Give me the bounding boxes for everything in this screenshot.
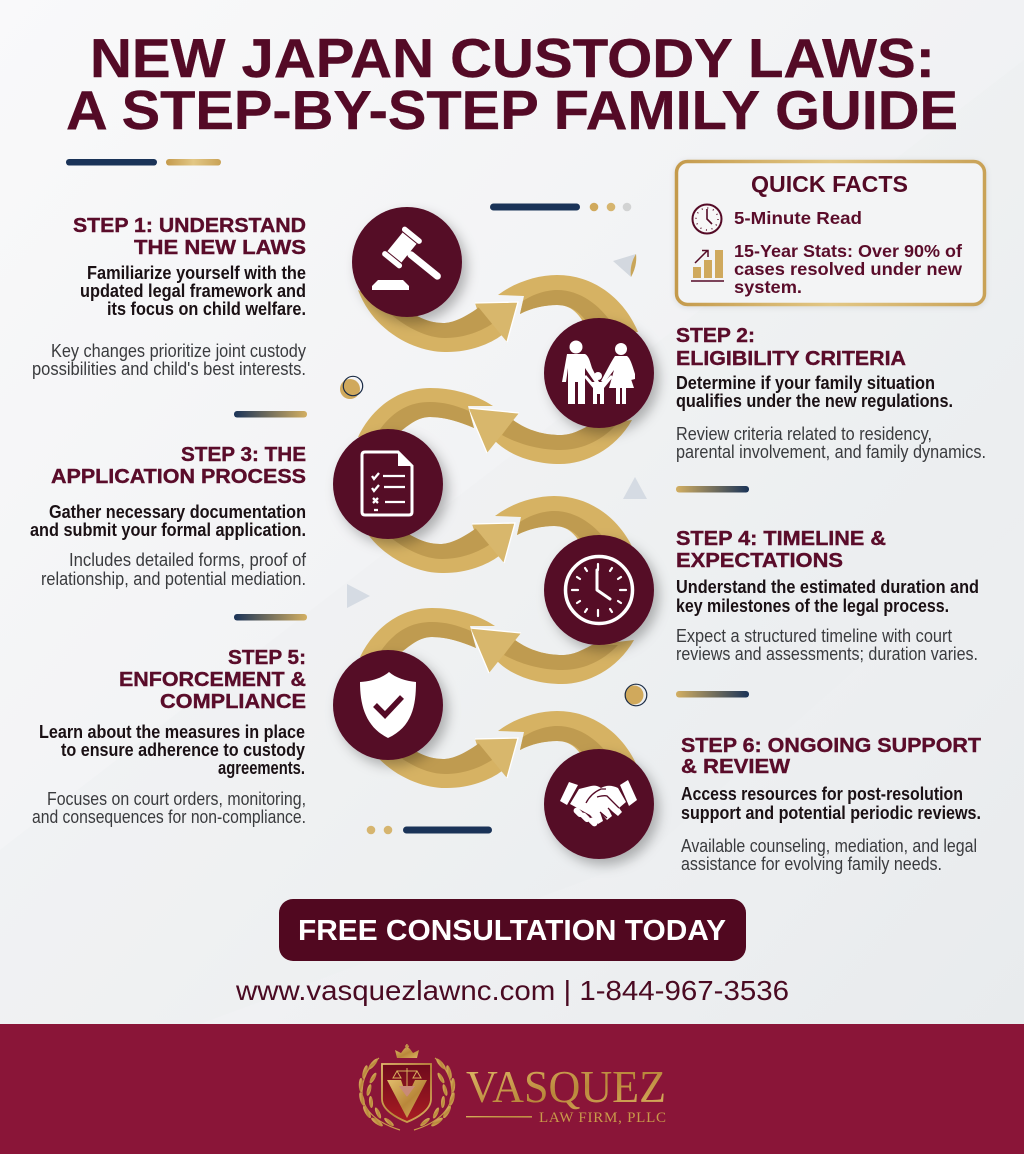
step 4 text block: reviews and assessments; duration varies. — [676, 644, 978, 664]
step 1 text block — [32, 214, 306, 379]
logo: laurel left — [358, 1057, 400, 1130]
step 6 text block — [681, 734, 981, 874]
step 1 text block: Familiarize yourself with the — [87, 263, 306, 283]
step 1 text block: STEP 1: UNDERSTAND — [73, 214, 306, 237]
step 6 text block: STEP 6: ONGOING SUPPORT — [681, 734, 981, 757]
decorative bar and dots: bottom — [367, 826, 492, 834]
15-year stats text: cases resolved under new — [734, 259, 962, 279]
step 1 circle: gavel icon — [352, 207, 462, 317]
step 4 text block: Understand the estimated duration and — [676, 577, 979, 597]
step 3 circle: checklist document icon — [333, 429, 443, 539]
decorative ring: left — [340, 376, 363, 399]
logo: rule — [466, 1116, 532, 1118]
logo: shield — [382, 1064, 431, 1122]
step 6 text block: assistance for evolving family needs. — [681, 854, 942, 874]
step 5 text block — [32, 646, 306, 827]
footer band — [0, 1024, 1024, 1154]
step 2 text block: ELIGIBILITY CRITERIA — [676, 347, 906, 370]
decorative bar and dots: top — [490, 203, 631, 211]
logo: laurel right — [414, 1057, 456, 1130]
step 5 text block: ENFORCEMENT & — [119, 668, 306, 691]
step 5 text block: and consequences for non-compliance. — [32, 807, 306, 827]
step 6 text block: support and potential periodic reviews. — [681, 803, 981, 823]
15-year stats text: 15-Year Stats: Over 90% of — [734, 241, 962, 261]
step 4 text block: key milestones of the legal process. — [676, 596, 949, 616]
title: NEW JAPAN CUSTODY LAWS: — [90, 27, 935, 89]
divider: right 2 — [676, 691, 749, 698]
step 4 text block — [676, 527, 979, 664]
decorative triangle: top right — [613, 254, 636, 277]
title accent bars — [66, 159, 221, 166]
quick facts panel — [676, 162, 984, 304]
step 5 text block: STEP 5: — [228, 646, 306, 669]
step 3 text block: Includes detailed forms, proof of — [69, 550, 307, 570]
step 1 text block: updated legal framework and — [80, 281, 306, 301]
step 5 text block: Learn about the measures in place — [39, 722, 305, 742]
arrow: step 2 to step 3 — [358, 388, 632, 464]
step 2 text block: STEP 2: — [676, 324, 755, 347]
step 3 text block — [30, 443, 307, 589]
step 5 text block: agreements. — [218, 758, 305, 778]
contact line: www.vasquezlawnc.com | 1-844-967-3536 — [235, 975, 789, 1006]
arrow: step 1 to step 2 — [358, 275, 638, 352]
divider: left 1 — [234, 411, 307, 418]
step 4 circle: clock icon — [544, 535, 654, 645]
step 3 text block: STEP 3: THE — [181, 443, 306, 466]
step 2 text block: parental involvement, and family dynamics. — [676, 442, 986, 462]
decorative triangle: centre right — [623, 477, 647, 499]
divider: right 1 — [676, 486, 749, 492]
logo: crown — [395, 1044, 419, 1058]
step 3 text block: and submit your formal application. — [30, 520, 306, 540]
title — [66, 27, 958, 141]
step 3 text block: relationship, and potential mediation. — [41, 569, 306, 589]
step 6 text block: Access resources for post-resolution — [681, 784, 963, 804]
arrow: step 3 to step 4 — [355, 496, 635, 573]
step 2 circle: family icon — [544, 318, 654, 428]
step 1 text block: possibilities and child's best interests. — [32, 359, 306, 379]
logo: wordmark: VASQUEZ — [466, 1061, 666, 1112]
step 1 text block: THE NEW LAWS — [134, 236, 306, 259]
step 6 text block: Available counseling, mediation, and legal — [681, 836, 977, 856]
step 6 circle: handshake icon — [544, 749, 654, 859]
5-minute read text: 5-Minute Read — [734, 208, 862, 228]
15-year stats text: system. — [734, 277, 802, 297]
step 5 text block: Focuses on court orders, monitoring, — [47, 789, 306, 809]
step 1 text block: Key changes prioritize joint custody — [51, 341, 306, 361]
step 1 text block: its focus on child welfare. — [107, 299, 306, 319]
step 4 text block: Expect a structured timeline with court — [676, 626, 952, 646]
divider: left 2 — [234, 614, 307, 620]
step 4 text block: EXPECTATIONS — [676, 549, 843, 572]
icon: rising bar chart — [691, 250, 724, 281]
call to action button: FREE CONSULTATION TODAY — [298, 915, 726, 947]
step 6 text block: & REVIEW — [681, 755, 791, 778]
step 5 circle: shield check icon — [333, 650, 443, 760]
step 4 text block: STEP 4: TIMELINE & — [676, 527, 886, 550]
step 5 text block: to ensure adherence to custody — [61, 740, 305, 760]
quick facts heading: QUICK FACTS — [751, 171, 908, 197]
step 5 text block: COMPLIANCE — [160, 690, 306, 713]
step 2 text block: Determine if your family situation — [676, 373, 935, 393]
title: A STEP-BY-STEP FAMILY GUIDE — [66, 79, 958, 141]
icon: clock — [692, 204, 722, 234]
footer logo — [358, 1044, 666, 1130]
step 2 text block: qualifies under the new regulations. — [676, 391, 953, 411]
decorative ring: right — [624, 684, 647, 706]
step 2 text block — [676, 324, 986, 462]
step 2 text block: Review criteria related to residency, — [676, 424, 932, 444]
logo: firm name: LAW FIRM, PLLC — [539, 1110, 666, 1126]
step 3 text block: APPLICATION PROCESS — [51, 465, 306, 488]
15-year stats text — [734, 241, 962, 297]
decorative triangle: centre left — [347, 584, 370, 608]
arrow: step 5 to step 6 — [358, 711, 638, 788]
step 3 text block: Gather necessary documentation — [49, 502, 306, 522]
call to action button — [279, 899, 746, 961]
arrow: step 4 to step 5 — [360, 608, 634, 684]
